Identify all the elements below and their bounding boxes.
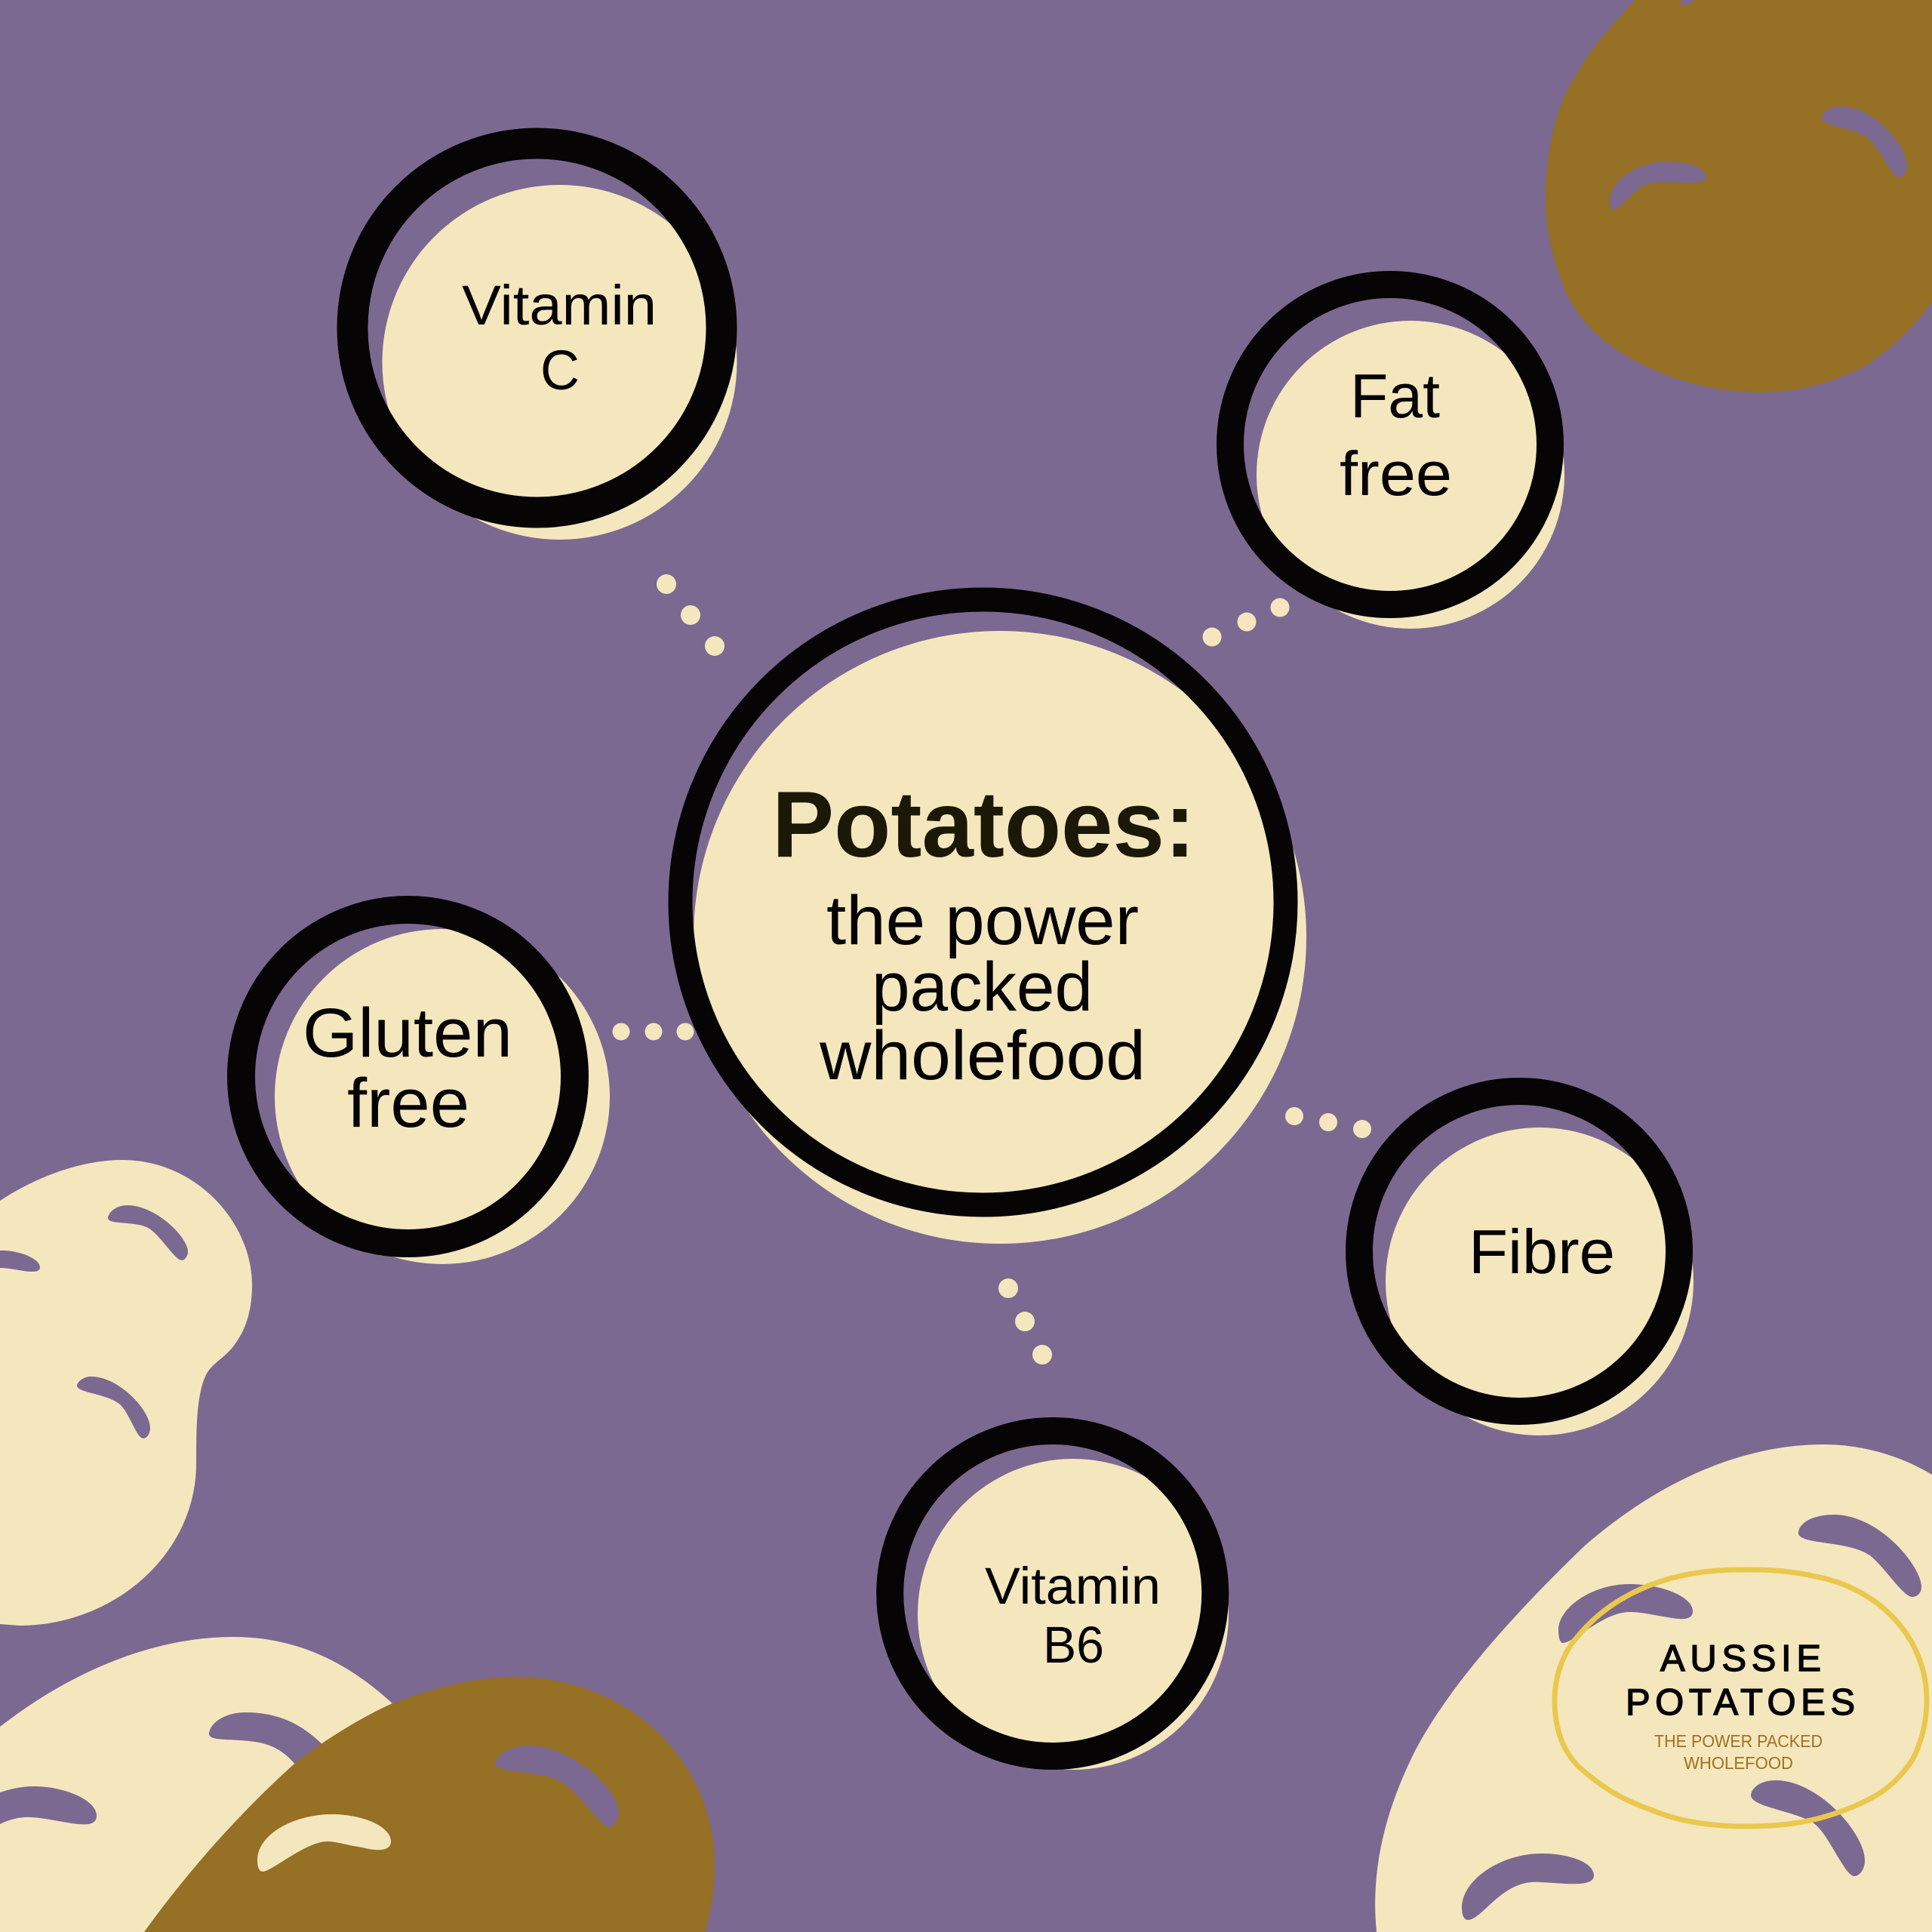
label: free: free [347, 1065, 469, 1142]
dots: Fat free connector [1203, 598, 1289, 646]
logo wordmark line 2: POTATOES [1626, 1682, 1855, 1723]
title: Potatoes: Potatoes: [772, 773, 1195, 877]
circle: Fat free [1230, 285, 1564, 629]
potato: cream lower left [0, 1637, 396, 1932]
potato: brown top right [1546, 0, 1932, 392]
dots: Fibre connector [1285, 1107, 1371, 1138]
subtitle line: packed: packed [872, 949, 1093, 1026]
dots: Gluten free connector [613, 1023, 694, 1040]
logo tagline line 2: WHOLEFOOD [1684, 1753, 1793, 1773]
label: Gluten: Gluten [303, 995, 512, 1072]
logo tagline: THE POWER PACKED [1654, 1731, 1823, 1751]
circle: Vitamin B6 [890, 1431, 1229, 1770]
label: Fibre: Fibre [1469, 1217, 1615, 1287]
potato: cream bottom right [1375, 1444, 1932, 1932]
label: Vitamin: Vitamin [985, 1557, 1161, 1615]
logo wordmark: AUSSIE [1660, 1638, 1821, 1679]
logo outline [1555, 1570, 1927, 1826]
circle: Fibre [1359, 1091, 1694, 1435]
label: Fat: Fat [1350, 361, 1440, 431]
dots: Vitamin B6 connector [998, 1278, 1052, 1364]
potato: brown bottom left [144, 1677, 715, 1932]
potato: cream left [0, 1160, 252, 1626]
subtitle line: the power: the power [826, 882, 1139, 959]
label: Vitamin C: Vitamin [462, 274, 657, 337]
label line 2: C [540, 339, 580, 401]
dots: Vitamin C connector [657, 574, 724, 656]
label: free: free [1340, 438, 1452, 509]
circle: Vitamin C [352, 143, 737, 540]
logo: Aussie Potatoes [1555, 1570, 1927, 1826]
label: B6: B6 [1043, 1616, 1104, 1674]
circle: Gluten free [242, 910, 610, 1264]
circle: central title [681, 599, 1306, 1244]
subtitle line: wholefood: wholefood [819, 1017, 1146, 1094]
